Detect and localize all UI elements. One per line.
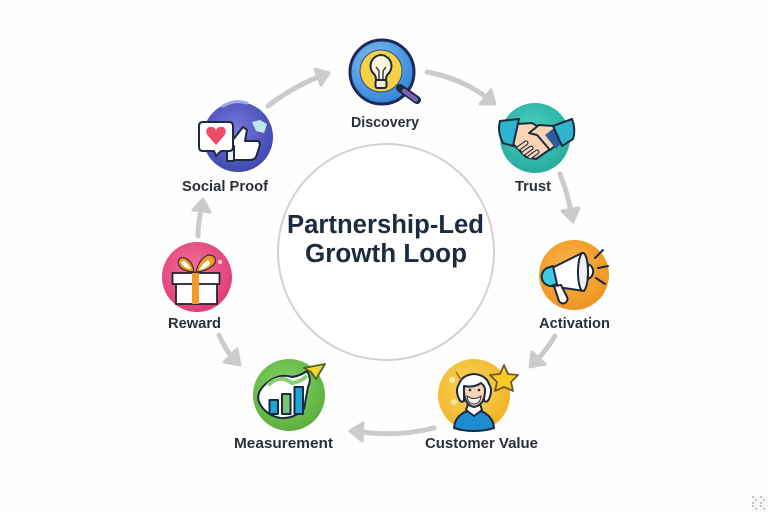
arrow: social proof to discovery [268,69,329,106]
label: reward: Reward [168,316,221,332]
watermark [752,496,768,512]
node: customer value [425,359,538,452]
arrow: reward to measurement [219,335,240,365]
node: social proof [182,102,273,195]
label: social proof: Social Proof [182,179,268,195]
icon: magnifier with light bulb [350,40,417,104]
label: activation: Activation [539,316,610,332]
arrow: trust to activation [560,174,579,222]
arrow: discovery to trust [427,72,495,104]
icon: megaphone [539,240,609,310]
node: trust [499,103,574,195]
arrow: customer value to measurement [350,423,434,441]
icon: speech bubble and thumbs up [199,102,273,172]
icon: handshake [499,103,574,173]
node: discovery [350,40,419,131]
node: measurement [234,359,333,452]
title: Growth Loop [305,240,467,268]
icon: growth chart [253,359,325,431]
label: customer value: Customer Value [425,436,538,452]
title [287,211,484,268]
icon: gift box [162,242,232,312]
arrow: activation to customer value [530,336,555,367]
label: measurement: Measurement [234,436,333,452]
label: discovery: Discovery [351,115,419,131]
center circle with title [278,144,494,360]
arrow: reward to social proof [193,199,210,236]
icon: customer with star [438,359,518,431]
node: reward [162,242,232,332]
title: Partnership-Led [287,211,484,239]
label: trust: Trust [515,179,551,195]
node: activation [539,240,610,332]
